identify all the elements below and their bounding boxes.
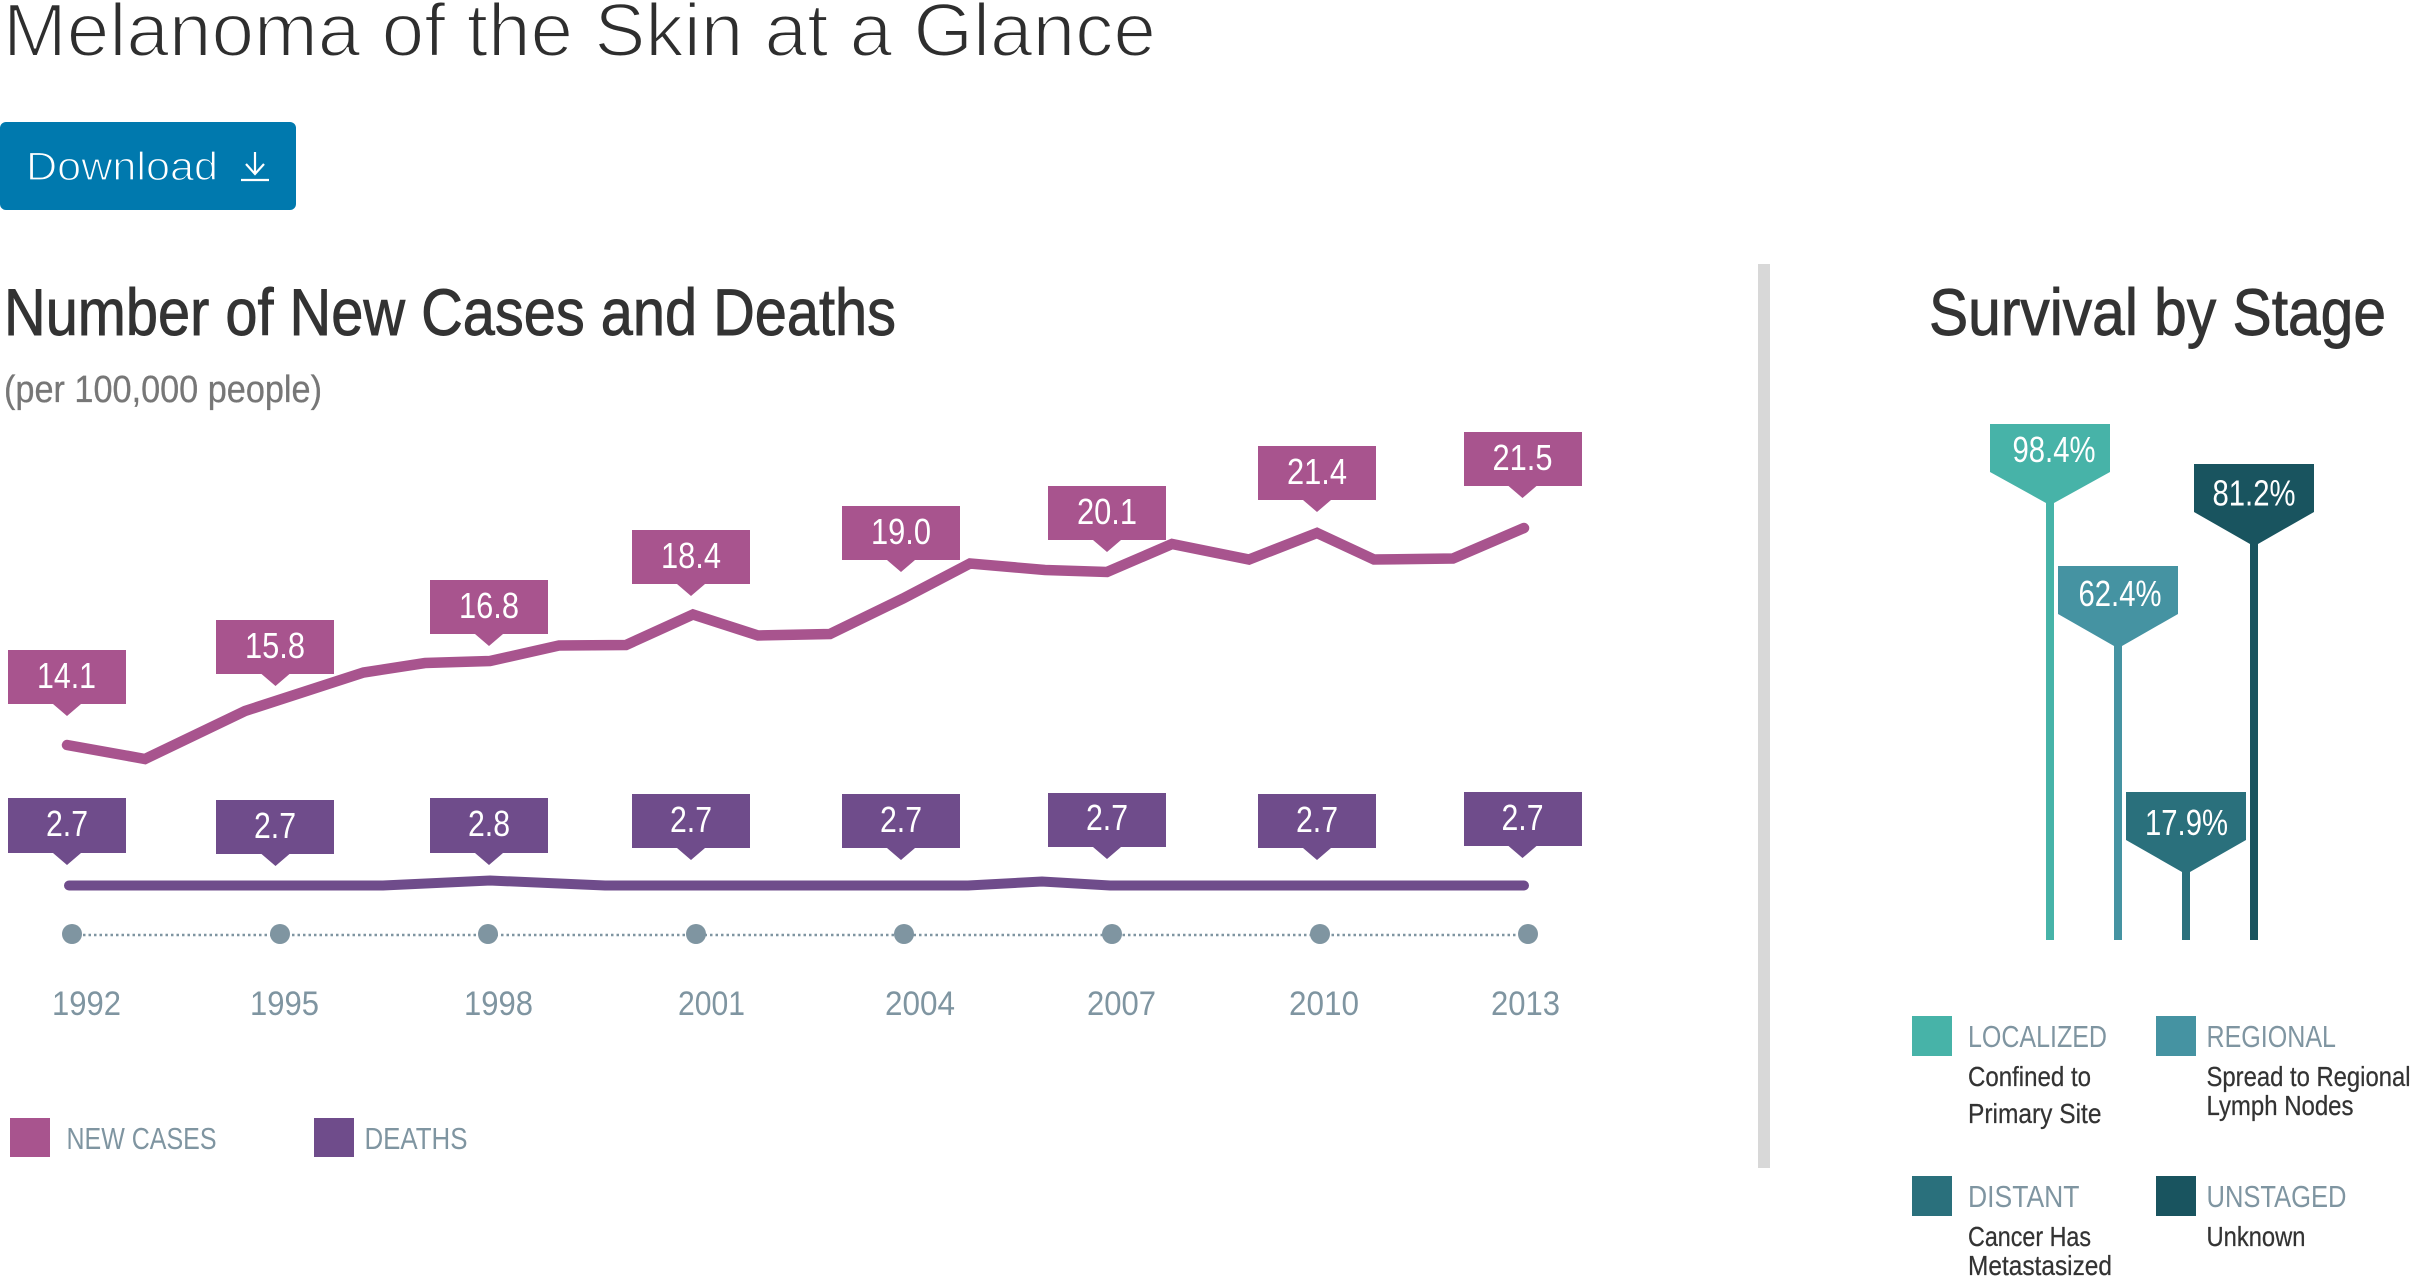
year labels: 2007: [1087, 985, 1156, 1023]
callout: 1992 new cases: [8, 650, 126, 716]
year labels: 2013: [1491, 985, 1560, 1023]
callout: 2004 deaths: 2.7: [880, 799, 922, 840]
pin: unstaged: 81.2%: [2212, 472, 2296, 514]
pin: localized: 98.4%: [2012, 429, 2096, 470]
year labels: 2004: [885, 985, 955, 1023]
panel: survival by stage: [1912, 275, 2410, 1278]
pin: regional: [2058, 566, 2178, 940]
download button: Download: [26, 145, 218, 189]
callout: 1998 deaths: 2.8: [468, 803, 510, 844]
panel: new cases and deaths: [4, 275, 1582, 1157]
callout: 1995 new cases: 15.8: [245, 625, 305, 666]
legend: localized: [1912, 1016, 2107, 1129]
legend: localized: Primary Site: [1968, 1098, 2102, 1129]
callout: 2007 new cases: 20.1: [1077, 491, 1137, 532]
heading: new cases and deaths: Number of New Cases and Deaths: [4, 275, 896, 349]
legend: unstaged: [2156, 1176, 2346, 1252]
callout: 2007 new cases: [1048, 486, 1166, 552]
legend: regional: [2156, 1016, 2410, 1121]
callout: 1998 new cases: [430, 580, 548, 646]
pin: distant: 17.9%: [2145, 802, 2228, 843]
callout: 1992 deaths: [8, 798, 126, 865]
legend: distant: DISTANT: [1968, 1179, 2080, 1214]
callout: 2013 deaths: [1464, 792, 1582, 858]
legend: new cases and deaths: [10, 1118, 468, 1157]
callout: 2013 new cases: [1464, 432, 1582, 498]
callout: 2013 deaths: 2.7: [1502, 797, 1544, 838]
callout: 2001 deaths: 2.7: [670, 799, 712, 840]
callout: 1995 deaths: [216, 800, 334, 866]
callout: 2010 new cases: 21.4: [1287, 451, 1347, 492]
year labels: [52, 985, 1560, 1023]
legend: localized: LOCALIZED: [1968, 1019, 2107, 1054]
legend: new cases and deaths: DEATHS: [364, 1121, 468, 1156]
callout: 1992 deaths: 2.7: [46, 803, 88, 844]
download button: [0, 122, 296, 210]
callout: 1995 deaths: 2.7: [254, 805, 296, 846]
legend: unstaged: Unknown: [2206, 1221, 2306, 1252]
callout: 1998 deaths: [430, 798, 548, 865]
legend: new cases and deaths: NEW CASES: [66, 1121, 216, 1156]
callout: 2001 deaths: [632, 794, 750, 860]
callout: 1992 new cases: 14.1: [37, 655, 96, 696]
callout: 2013 new cases: 21.5: [1492, 437, 1552, 478]
pin: distant: [2126, 792, 2246, 940]
year labels: 1992: [52, 985, 121, 1023]
line: new cases: [67, 528, 1524, 759]
pin: localized: [1990, 424, 2110, 940]
line: deaths: [69, 880, 1524, 886]
callout: 2010 deaths: [1258, 794, 1376, 860]
legend: regional: Lymph Nodes: [2206, 1090, 2354, 1121]
year labels: 2010: [1289, 985, 1359, 1023]
pin: regional: 62.4%: [2078, 573, 2162, 614]
year labels: 1995: [250, 985, 319, 1023]
timeline axis: [52, 924, 1560, 1023]
legend: regional: REGIONAL: [2206, 1019, 2336, 1054]
callout: 2001 new cases: 18.4: [661, 535, 721, 576]
callout: 2007 deaths: 2.7: [1086, 797, 1128, 838]
callout: 2001 new cases: [632, 530, 750, 596]
subheading: (per 100,000 people): [4, 369, 322, 411]
callouts: new cases: [8, 432, 1582, 716]
legend: distant: [1912, 1176, 2112, 1278]
divider: [1758, 264, 1770, 1168]
callout: 2007 deaths: [1048, 793, 1166, 859]
year labels: 2001: [678, 985, 745, 1023]
callout: 2004 deaths: [842, 794, 960, 860]
legend: distant: Cancer Has: [1968, 1221, 2091, 1252]
year labels: 1998: [464, 985, 533, 1023]
callout: 1995 new cases: [216, 620, 334, 686]
callout: 2010 deaths: 2.7: [1296, 799, 1338, 840]
legend: unstaged: UNSTAGED: [2206, 1179, 2346, 1214]
icon: download arrow: [241, 152, 269, 180]
pin: unstaged: [2194, 464, 2314, 940]
callouts: deaths: [8, 792, 1582, 866]
legend: localized: Confined to: [1968, 1061, 2091, 1092]
callout: 1998 new cases: 16.8: [459, 585, 519, 626]
callout: 2010 new cases: [1258, 446, 1376, 512]
callout: 2004 new cases: 19.0: [871, 511, 931, 552]
callout: 2004 new cases: [842, 506, 960, 572]
